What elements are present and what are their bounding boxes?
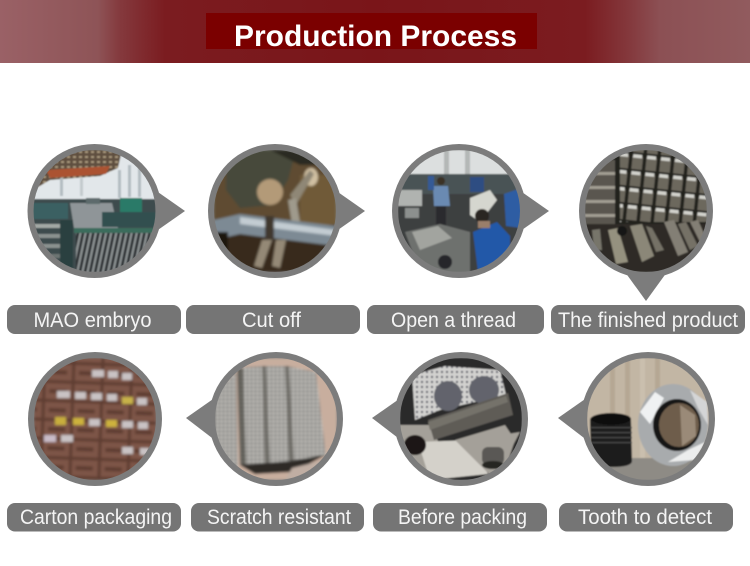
bubble with right arrow [208,144,365,278]
step 4: The finished product [551,144,745,334]
bubble with right arrow [392,144,549,278]
label [373,503,547,532]
label: Cut off [242,309,301,332]
photo: stacked cartons [34,358,156,480]
label [367,305,544,334]
header banner [0,0,750,63]
bubble with right arrow [28,144,185,278]
bubble with left arrow [186,352,343,486]
photo: stacked threaded nipples [585,150,707,272]
step 8: Tooth to detect [558,352,733,532]
bubble with left arrow [558,352,715,486]
label [186,305,360,334]
photo: wrapped pipes [215,358,337,480]
step 2: Cut off [186,144,365,334]
label: Open a thread [391,309,516,332]
bubble with down arrow [579,144,713,301]
label [7,305,181,334]
label: MAO embryo [34,309,152,332]
photo: factory hall [33,150,156,272]
label [559,503,733,532]
label: Carton packaging [20,506,172,529]
step 6: Scratch resistant [186,352,364,532]
step 1: MAO embryo [7,144,185,334]
step 7: Before packing [372,352,547,532]
photo: threaded pipe and gauge ring [587,358,709,480]
bubble [28,352,162,486]
label: Before packing [398,506,527,529]
step 5: Carton packaging [7,352,181,532]
label: Scratch resistant [207,506,351,529]
photo: cutting a pipe [214,150,336,272]
photo: workers at lathes [398,150,521,272]
step 3: Open a thread [367,144,549,334]
label: The finished product [558,309,738,332]
photo: pipe on bubble wrap [400,358,522,480]
title: Production Process [234,20,517,53]
label: Tooth to detect [578,506,712,529]
bubble with left arrow [372,352,528,486]
